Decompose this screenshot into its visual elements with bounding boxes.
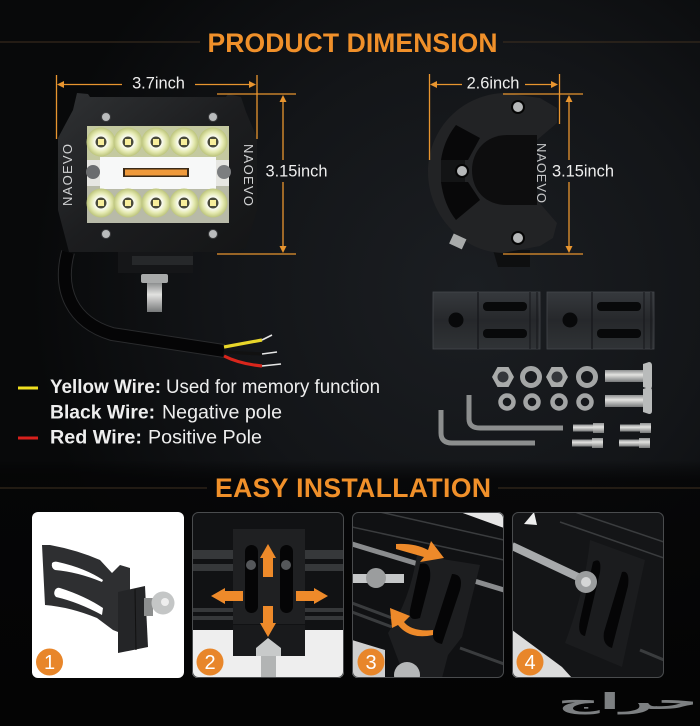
red wire row: Red Wire:	[50, 428, 142, 448]
number badge 1	[36, 648, 63, 676]
logo left: NAOEVO	[60, 144, 75, 206]
wires	[224, 335, 281, 366]
step 4 panel	[512, 512, 664, 678]
panel outlines	[192, 512, 664, 678]
red wire row: Positive Pole	[148, 428, 262, 448]
dimension: front height	[217, 94, 327, 254]
cable	[65, 252, 224, 351]
black wire row	[50, 402, 282, 424]
bolt	[353, 568, 420, 677]
arrows	[211, 544, 328, 637]
side bolt	[449, 234, 466, 249]
logo right: NAOEVO	[241, 144, 256, 206]
number badge 3	[358, 648, 384, 676]
tool and bolt	[512, 546, 597, 593]
mounting bracket and bolt	[118, 250, 193, 312]
inner recess	[472, 135, 537, 205]
number badge 3: 3	[365, 652, 377, 674]
heading: product dimension: PRODUCT DIMENSION	[208, 28, 498, 58]
number badge 4: 4	[524, 652, 536, 674]
black wire row: Black Wire:	[50, 402, 155, 424]
rotation arrows	[390, 541, 444, 636]
bolt	[256, 638, 281, 678]
number badge 2: 2	[204, 652, 216, 674]
side logo: NAOEVO	[534, 143, 549, 203]
watermark: حراج	[558, 689, 698, 714]
side screws	[456, 101, 524, 244]
side housing	[428, 93, 557, 253]
step 1 panel	[32, 512, 184, 678]
dimension: front height: 3.15inch	[266, 162, 327, 180]
dimension: front width: 3.7inch	[132, 74, 185, 92]
dimension: side width: 2.6inch	[467, 74, 519, 92]
mounting plates	[433, 292, 654, 349]
bolt nut	[144, 592, 174, 616]
dimension: side height	[503, 94, 614, 254]
side bracket stub	[493, 250, 530, 267]
yellow wire row: Used for memory function	[166, 377, 380, 398]
step 3 panel	[352, 512, 504, 688]
dimension: side width	[430, 74, 560, 160]
lens panel	[86, 126, 231, 223]
yellow wire row: Yellow Wire:	[50, 377, 161, 398]
bracket	[233, 529, 305, 656]
side view light	[428, 93, 557, 267]
black wire row: Negative pole	[162, 402, 282, 424]
hardware kit	[441, 362, 652, 448]
wire legend	[18, 377, 380, 448]
number badge 2	[196, 648, 224, 676]
heading: easy installation: EASY INSTALLATION	[215, 473, 491, 503]
number badge 4	[516, 648, 544, 676]
number badge 1: 1	[44, 652, 55, 674]
step 2 panel	[192, 512, 344, 678]
dimension: front width	[56, 74, 257, 139]
front view light bar	[58, 93, 281, 366]
red wire row	[18, 428, 262, 448]
dimension: side height: 3.15inch	[552, 162, 614, 180]
side windows	[441, 125, 480, 160]
yellow wire row	[18, 377, 380, 398]
housing	[58, 93, 257, 252]
bracket	[388, 555, 480, 678]
bracket	[565, 540, 645, 667]
bracket	[42, 545, 148, 653]
screws	[102, 112, 218, 238]
